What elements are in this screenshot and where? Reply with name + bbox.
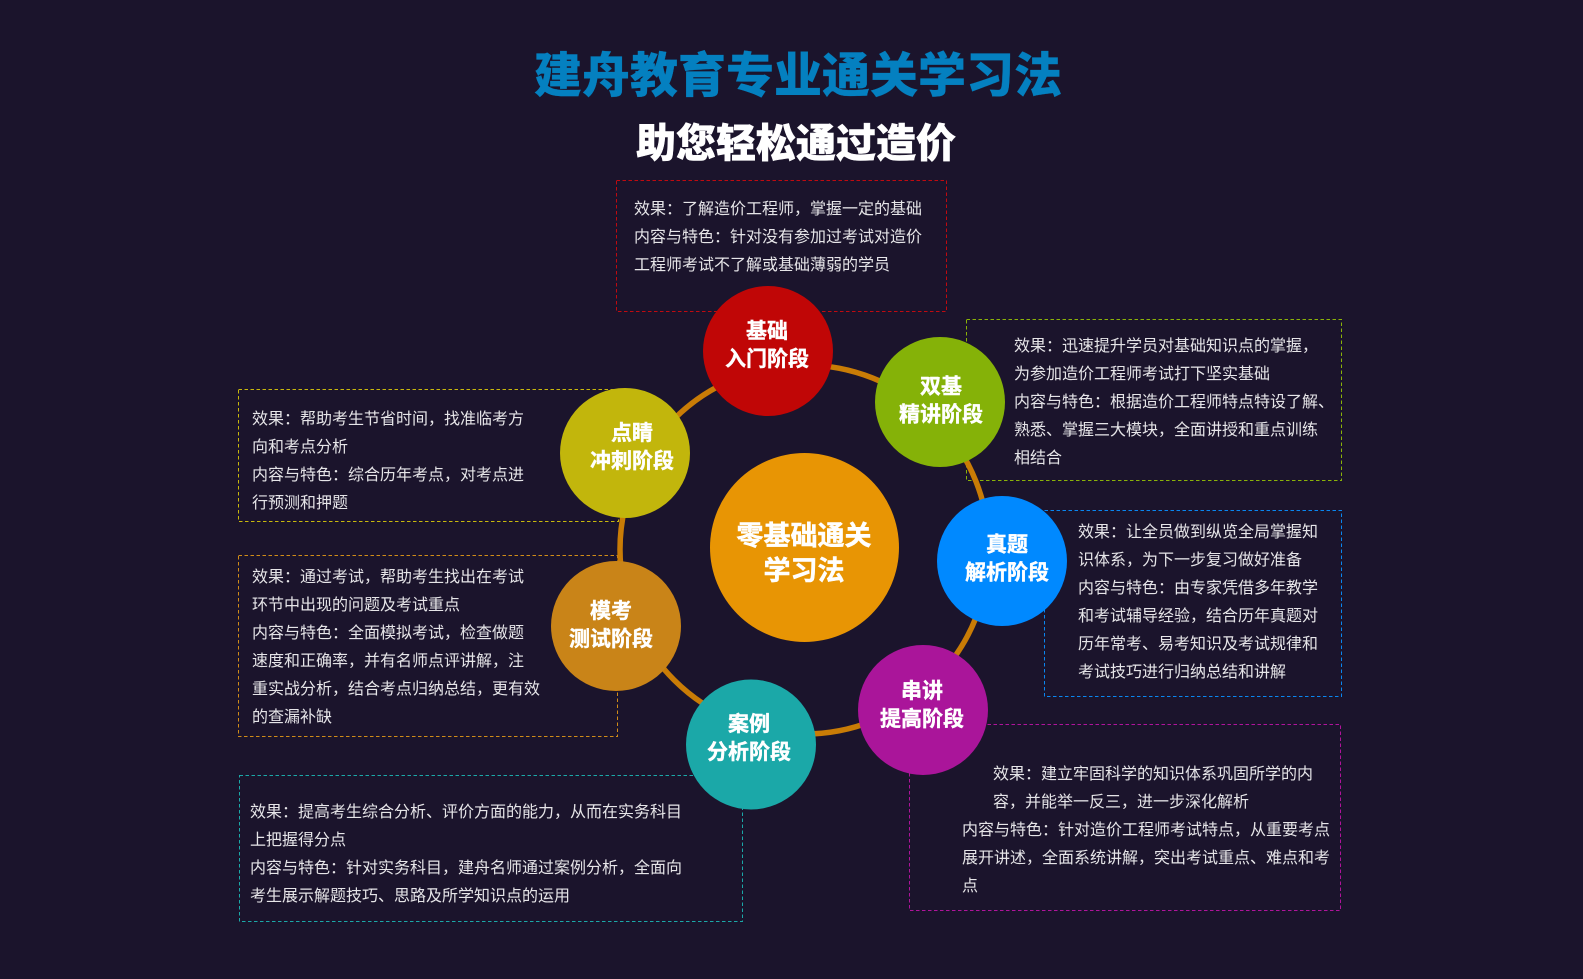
node: 双基精讲阶段: 双基 [920,376,962,398]
ring connecting stages [620,365,989,734]
panel: 真题解析 description [1044,510,1342,696]
center circle: 零基础通关学习法: 零基础通关 [736,521,872,551]
node: 串讲提高阶段: 串讲 [901,680,943,703]
panel: 基础入门 description: 工程师考试不了解或基础薄弱的学员 [634,256,890,274]
node: 点睛冲刺阶段: 点睛 [611,422,653,445]
panel: 模考测试 description [238,556,618,736]
subtitle: 助您轻松通过造价 [636,122,956,166]
panel: 真题解析 description: 识体系，为下一步复习做好准备 [1078,551,1302,569]
node: 点睛冲刺阶段 [560,388,690,518]
node: 模考测试阶段: 测试阶段 [569,627,653,651]
panel: 点睛冲刺 description: 向和考点分析 [252,438,348,456]
panel: 基础入门 description: 效果：了解造价工程师，掌握一定的基础 [634,200,922,218]
node: 模考测试阶段 [551,561,681,691]
panel: 串讲提高 description: 展开讲述，全面系统讲解，突出考试重点、难点和考 [962,849,1330,867]
panel: 模考测试 description: 内容与特色：全面模拟考试，检查做题 [252,624,524,642]
panel: 点睛冲刺 description [238,390,618,522]
node: 真题解析阶段: 真题 [986,534,1028,556]
node: 真题解析阶段: 解析阶段 [965,560,1049,584]
node: 双基精讲阶段 [875,337,1005,467]
panel: 串讲提高 description [910,724,1340,910]
panel: 点睛冲刺 description: 效果：帮助考生节省时间，找准临考方 [252,410,524,428]
panel: 案例分析 description: 效果：提高考生综合分析、评价方面的能力，从而在实务科目 [250,803,682,821]
panel: 模考测试 description: 速度和正确率，并有名师点评讲解，注 [252,652,524,670]
panel: 串讲提高 description: 容，并能举一反三，进一步深化解析 [993,793,1249,811]
panel: 串讲提高 description: 点 [962,877,978,895]
node: 串讲提高阶段 [858,645,988,775]
panel: 模考测试 description: 的查漏补缺 [252,708,332,726]
panel: 基础入门 description [616,180,946,312]
node: 基础入门阶段 [703,286,833,416]
panel: 真题解析 description: 和考试辅导经验，结合历年真题对 [1078,607,1318,625]
panel: 模考测试 description: 重实战分析，结合考点归纳总结，更有效 [252,680,540,698]
panel: 双基精讲 description: 相结合 [1014,449,1062,467]
panel: 案例分析 description: 上把握得分点 [250,831,346,849]
node: 模考测试阶段: 模考 [590,600,632,623]
panel: 案例分析 description: 内容与特色：针对实务科目，建舟名师通过案例分析，全面向 [250,859,682,877]
node: 基础入门阶段: 入门阶段 [725,347,809,371]
panel: 串讲提高 description: 效果：建立牢固科学的知识体系巩固所学的内 [993,765,1313,783]
panel: 双基精讲 description: 为参加造价工程师考试打下坚实基础 [1014,365,1270,383]
node: 双基精讲阶段: 精讲阶段 [899,402,983,426]
panel: 真题解析 description: 效果：让全员做到纵览全局掌握知 [1078,523,1318,541]
title: 建舟教育专业通关学习法 [534,49,1062,103]
panel: 案例分析 description [240,776,742,922]
panel: 案例分析 description: 考生展示解题技巧、思路及所学知识点的运用 [250,887,570,905]
panel: 真题解析 description: 历年常考、易考知识及考试规律和 [1078,635,1318,653]
panel: 双基精讲 description: 效果：迅速提升学员对基础知识点的掌握， [1014,337,1318,355]
node: 真题解析阶段 [937,496,1067,626]
node: 基础入门阶段: 基础 [746,320,788,343]
center circle: 零基础通关学习法: 学习法 [764,556,844,586]
panel: 真题解析 description: 内容与特色：由专家凭借多年教学 [1078,579,1318,597]
center circle: 零基础通关学习法 [710,453,899,642]
node: 案例分析阶段: 案例 [728,713,770,736]
panel: 点睛冲刺 description: 行预测和押题 [252,494,348,512]
panel: 双基精讲 description: 内容与特色：根据造价工程师特点特设了解、 [1014,393,1334,411]
panel: 模考测试 description: 效果：通过考试，帮助考生找出在考试 [252,568,524,586]
node: 串讲提高阶段: 提高阶段 [880,707,964,731]
node: 点睛冲刺阶段: 冲刺阶段 [590,449,674,473]
node: 案例分析阶段: 分析阶段 [707,740,791,764]
panel: 双基精讲 description [966,320,1342,480]
panel: 串讲提高 description: 内容与特色：针对造价工程师考试特点，从重要考点 [962,821,1330,839]
panel: 点睛冲刺 description: 内容与特色：综合历年考点，对考点进 [252,466,524,484]
panel: 模考测试 description: 环节中出现的问题及考试重点 [252,596,460,614]
panel: 真题解析 description: 考试技巧进行归纳总结和讲解 [1078,663,1286,681]
panel: 双基精讲 description: 熟悉、掌握三大模块，全面讲授和重点训练 [1014,421,1318,439]
node: 案例分析阶段 [686,680,816,810]
panel: 基础入门 description: 内容与特色：针对没有参加过考试对造价 [634,228,922,246]
